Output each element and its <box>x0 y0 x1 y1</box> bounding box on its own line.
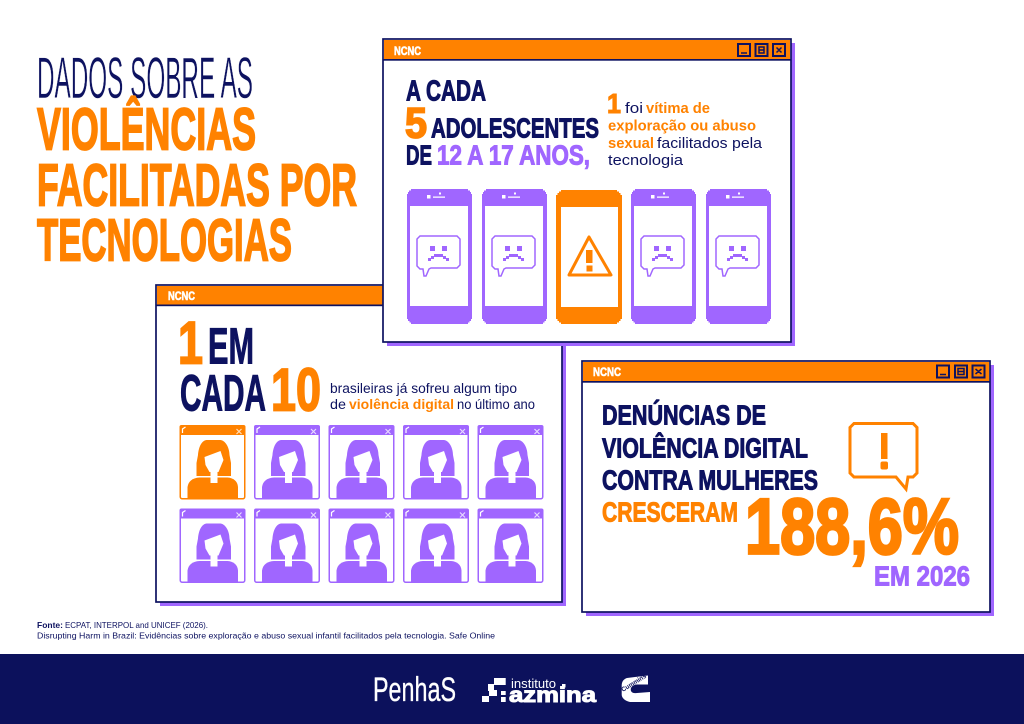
icon: phone 5 sad message <box>706 189 771 324</box>
window controls <box>738 44 785 56</box>
icon: phone 4 sad message <box>631 189 696 324</box>
logo: instituto azmina: instituto <box>511 676 556 691</box>
statistic description: facilitados pela <box>657 136 763 152</box>
logo: instituto azmina: azmina <box>509 684 596 707</box>
panel: denúncias: NCNC <box>593 365 621 379</box>
statistic description: vítima de <box>646 101 710 117</box>
icon: profile row 1 col 5 <box>478 425 544 499</box>
year label: EM 2026 <box>874 560 970 592</box>
title: DADOS SOBRE AS <box>37 46 253 111</box>
footer band <box>0 654 1024 724</box>
statistic heading: VIOLÊNCIA DIGITAL <box>602 432 808 464</box>
icon: profile row 1 col 3 <box>328 425 394 499</box>
icon: phone 1 sad message <box>407 189 472 324</box>
statistic description: exploração ou abuso <box>608 118 756 134</box>
statistic heading <box>405 76 599 170</box>
statistic heading: DENÚNCIAS DE <box>602 400 766 430</box>
statistic heading: CONTRA MULHERES <box>602 464 818 496</box>
logo: instituto azmina <box>482 676 596 707</box>
statistic description <box>607 88 763 169</box>
statistic description: no último ano <box>457 397 535 412</box>
icon: profile row 2 col 2 <box>254 508 320 582</box>
statistic heading: DE <box>406 140 432 170</box>
source note: ECPAT, INTERPOL and UNICEF (2026). <box>65 620 208 630</box>
logo: Penhas: PenhaS <box>373 671 456 709</box>
icon: phone 2 sad message <box>482 189 547 324</box>
statistic heading: CRESCERAM <box>602 496 738 528</box>
source note <box>37 620 495 640</box>
title: TECNOLOGIAS <box>37 208 292 274</box>
statistic heading <box>178 310 321 424</box>
icon: profile row 2 col 4 <box>403 508 469 582</box>
icon: profile row 2 col 5 <box>478 508 544 582</box>
icon: profile row 2 col 3 <box>328 508 394 582</box>
icon: phone 3 warning <box>556 190 622 324</box>
panel: a cada 5 adolescentes: NCNC <box>394 44 421 58</box>
statistic heading: 5 <box>405 100 427 148</box>
icon: profile row 1 col 2 <box>254 425 320 499</box>
panel: 1 em cada 10 <box>156 285 566 606</box>
statistic description: violência digital <box>349 397 454 412</box>
source note: Fonte: <box>37 620 63 630</box>
statistic description: tecnologia <box>608 153 684 169</box>
statistic description: sexual <box>608 136 654 152</box>
icon: profile row 1 col 4 <box>403 425 469 499</box>
statistic heading: 12 A 17 ANOS, <box>437 140 590 170</box>
logo: Cummins: Cummins <box>620 673 648 694</box>
statistic description: de <box>330 397 346 412</box>
statistic description <box>330 381 535 412</box>
title: FACILITADAS POR <box>37 152 357 218</box>
statistic heading: 1 <box>178 310 203 376</box>
icon: highlighted profile <box>180 425 246 499</box>
title: VIOLÊNCIAS <box>37 96 256 162</box>
statistic heading: EM <box>208 318 254 374</box>
logo: Cummins <box>620 673 650 702</box>
big number: 188,6% <box>745 482 959 570</box>
statistic heading: ADOLESCENTES <box>431 112 599 144</box>
statistic heading <box>602 400 818 528</box>
statistic description: 1 <box>607 88 621 119</box>
statistic description: brasileiras já sofreu algum tipo <box>330 381 517 396</box>
statistic heading: A CADA <box>406 76 486 108</box>
statistic heading: 10 <box>271 356 321 424</box>
panel: a cada 5 adolescentes <box>383 39 795 346</box>
panel: 1 em cada 10: NCNC <box>168 289 195 303</box>
icon: alert speech bubble <box>850 424 917 489</box>
title <box>37 46 357 274</box>
icon grid: women profiles <box>180 425 544 582</box>
statistic description: foi <box>625 101 643 117</box>
icon: profile row 2 col 1 <box>180 508 246 582</box>
statistic heading: CADA <box>180 364 266 422</box>
panel: denúncias <box>582 361 994 616</box>
source note: Disrupting Harm in Brazil: Evidências sobre exploração e abuso sexual infantil facilitados pela tecnologia. Safe Online <box>37 630 495 640</box>
window controls <box>937 366 984 378</box>
